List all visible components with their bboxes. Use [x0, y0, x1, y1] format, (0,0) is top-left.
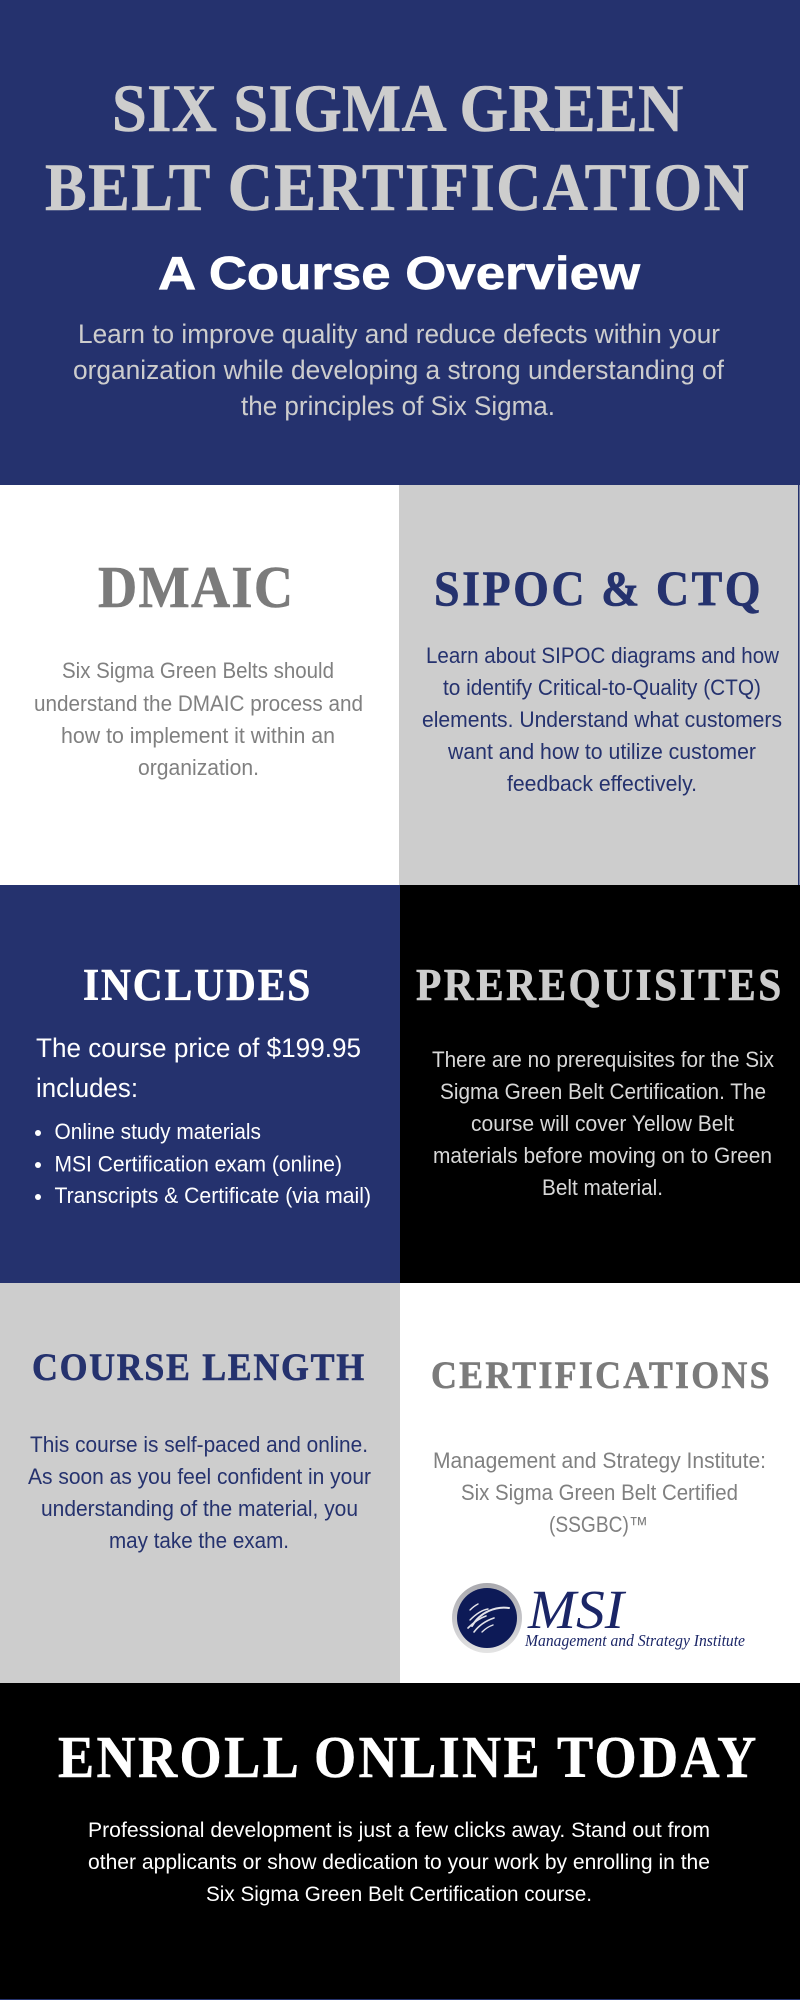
heading: enroll online today: ENROLL ONLINE TODAY	[58, 1725, 756, 1791]
prerequisites text: Belt material.	[542, 1175, 663, 1200]
DMAIC text	[34, 658, 363, 780]
SIPOC text	[422, 643, 782, 796]
title: SIX SIGMA GREEN	[112, 72, 683, 147]
course length text	[28, 1432, 371, 1553]
heading: includes: INCLUDES	[83, 960, 310, 1010]
course length text: may take the exam.	[109, 1528, 289, 1553]
panel: header	[0, 0, 800, 485]
panel: course length	[0, 1283, 400, 1683]
list of inclusions: Transcripts & Certificate (via mail)	[54, 1183, 371, 1208]
logo: MSI	[452, 1579, 745, 1653]
title	[45, 72, 749, 226]
list of inclusions	[35, 1119, 371, 1208]
panel: prerequisites	[400, 885, 800, 1283]
panel: SIPOC and CTQ	[399, 485, 800, 885]
SIPOC text: feedback effectively.	[507, 771, 697, 796]
prerequisites text: materials before moving on to Green	[433, 1143, 772, 1168]
logo tagline: Management and Strategy Institute	[524, 1631, 745, 1650]
course length text: This course is self-paced and online.	[30, 1432, 368, 1457]
subtitle: A Course Overview	[158, 247, 640, 299]
enroll text	[88, 1818, 710, 1906]
enroll text: other applicants or show dedication to your work by enrolling in the	[88, 1850, 710, 1874]
enroll text: Six Sigma Green Belt Certification course.	[206, 1882, 592, 1906]
enroll text: Professional development is just a few clicks away. Stand out from	[88, 1818, 710, 1842]
intro text	[73, 319, 725, 421]
SIPOC text: want and how to utilize customer	[447, 739, 756, 764]
intro text: the principles of Six Sigma.	[241, 391, 555, 421]
panel: enroll footer	[0, 1683, 800, 2000]
panel: certifications	[400, 1283, 800, 1683]
SIPOC text: Learn about SIPOC diagrams and how	[426, 643, 779, 668]
list of inclusions: MSI Certification exam (online)	[54, 1152, 342, 1176]
certifications text: Six Sigma Green Belt Certified	[461, 1480, 738, 1505]
heading: SIPOC and CTQ: SIPOC & CTQ	[434, 561, 761, 616]
title: BELT CERTIFICATION	[45, 151, 749, 226]
DMAIC text: organization.	[138, 755, 259, 780]
heading: DMAIC: DMAIC	[98, 555, 293, 621]
course length text: As soon as you feel confident in your	[28, 1464, 371, 1489]
DMAIC text: Six Sigma Green Belts should	[62, 658, 334, 683]
panel: includes	[0, 885, 400, 1283]
course length text: understanding of the material, you	[41, 1496, 358, 1521]
price text: includes:	[36, 1073, 138, 1103]
intro text: Learn to improve quality and reduce defects within your	[78, 319, 720, 349]
SIPOC text: to identify Critical-to-Quality (CTQ)	[443, 675, 761, 700]
prerequisites text: There are no prerequisites for the Six	[432, 1047, 774, 1072]
heading: prerequisites: PREREQUISITES	[416, 960, 781, 1010]
certifications text: Management and Strategy Institute:	[433, 1448, 766, 1473]
icon: MSI globe	[452, 1583, 522, 1653]
price text: The course price of $199.95	[36, 1033, 361, 1063]
panel: DMAIC	[0, 485, 399, 885]
price text	[36, 1033, 361, 1103]
heading: certifications: CERTIFICATIONS	[431, 1355, 770, 1397]
prerequisites text	[432, 1047, 774, 1200]
DMAIC text: how to implement it within an	[61, 723, 335, 748]
prerequisites text: Sigma Green Belt Certification. The	[440, 1079, 766, 1104]
certifications text: (SSGBC)™	[549, 1512, 648, 1537]
DMAIC text: understand the DMAIC process and	[34, 691, 363, 716]
prerequisites text: course will cover Yellow Belt	[471, 1111, 734, 1136]
heading: course length: COURSE LENGTH	[32, 1347, 364, 1389]
certifications text	[433, 1448, 766, 1537]
logo wordmark: MSI	[527, 1579, 627, 1640]
SIPOC text: elements. Understand what customers	[422, 707, 782, 732]
intro text: organization while developing a strong understanding of	[73, 355, 725, 385]
list of inclusions: Online study materials	[54, 1119, 261, 1144]
